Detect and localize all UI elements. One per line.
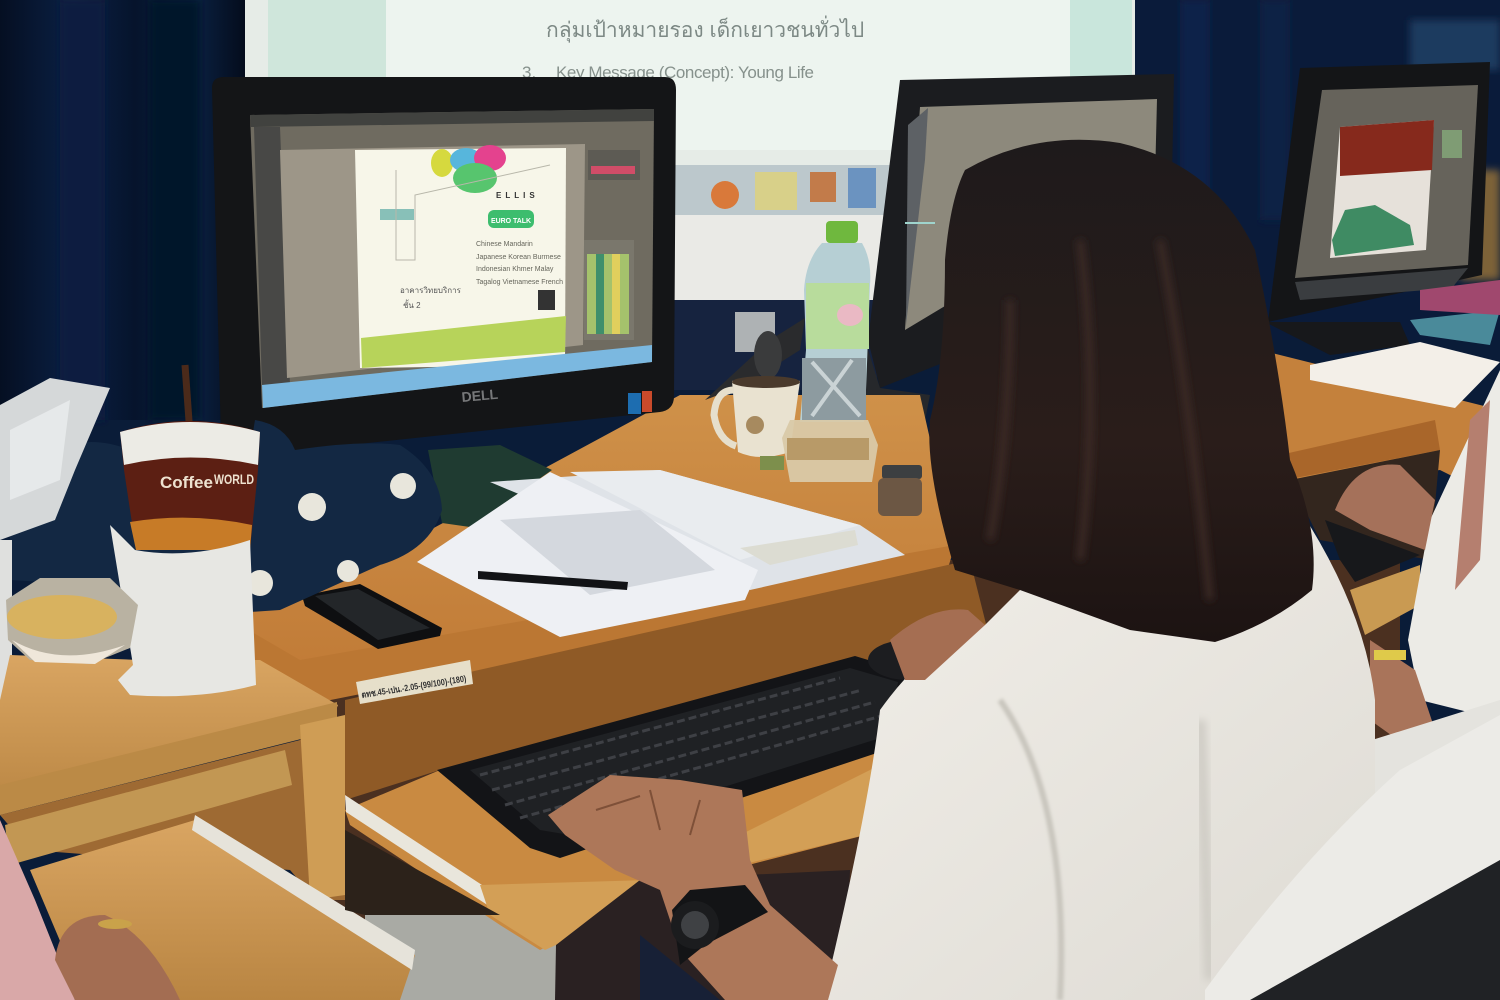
monitor: main Dell all-in-one bbox=[212, 77, 676, 527]
projector screen bbox=[245, 0, 1135, 390]
foreground chair and person bbox=[1205, 715, 1500, 1000]
woman: left forearm bbox=[890, 609, 985, 680]
stationery stack bbox=[1310, 280, 1500, 408]
woman: navy skirt bbox=[555, 870, 850, 1000]
artwork on screen: EURO TALK bbox=[491, 218, 531, 225]
desk: main surface bbox=[245, 395, 990, 800]
label strip on desk edge: ตทช.45-เปน.-2.05-(99/100)-(180) bbox=[361, 674, 467, 700]
side cabinet bbox=[0, 655, 415, 1000]
woman: shirt bbox=[770, 510, 1375, 1000]
curtain: right bbox=[1130, 0, 1500, 340]
artwork on screen: Tagalog Vietnamese French bbox=[476, 279, 563, 286]
artwork on screen: Indonesian Khmer Malay bbox=[476, 266, 554, 273]
artwork on screen: ELLIS bbox=[496, 191, 539, 200]
monitor stand bbox=[428, 445, 552, 527]
paper stack bbox=[417, 470, 905, 637]
keyboard tray bbox=[345, 750, 895, 950]
snack box bbox=[760, 420, 878, 482]
woman: hair bbox=[929, 140, 1314, 642]
coffee cup: WORLD bbox=[214, 471, 254, 487]
colour panel bbox=[588, 150, 640, 180]
DELL logo: DELL bbox=[461, 386, 499, 405]
monitor: right far bbox=[1265, 62, 1490, 355]
projector screen: 3. bbox=[522, 63, 536, 82]
keyboard bbox=[437, 656, 908, 858]
projected slide text: กลุ่มเป้าหมายรอง เด็กเยาวชนทั่วไป bbox=[546, 15, 864, 43]
small jar bbox=[878, 465, 922, 516]
wristwatch bbox=[671, 885, 768, 965]
artwork on screen: Japanese Korean Burmese bbox=[476, 254, 561, 261]
phone bbox=[302, 584, 442, 649]
water bottle bbox=[800, 221, 870, 422]
pastry box bbox=[6, 578, 138, 664]
plastic bag bbox=[0, 378, 110, 720]
coffee cup: Coffee bbox=[160, 473, 213, 492]
mouse bbox=[868, 640, 948, 680]
artwork on screen bbox=[380, 145, 563, 310]
paper cup bbox=[714, 376, 800, 457]
badges bbox=[628, 393, 641, 414]
curtain: left bbox=[0, 0, 245, 420]
polka dot bag bbox=[10, 420, 442, 612]
woman: right arm and hand bbox=[548, 775, 838, 1000]
headphones bbox=[705, 318, 805, 400]
artwork on screen: Chinese Mandarin bbox=[476, 241, 533, 248]
pen bbox=[478, 571, 628, 590]
monitor: center behind woman bbox=[860, 74, 1174, 420]
projected taskbar icons bbox=[711, 168, 876, 210]
projector screen: Key Message (Concept): Young Life bbox=[556, 63, 814, 82]
desk: back right bbox=[1260, 350, 1500, 635]
foreground person: left bbox=[0, 820, 180, 1000]
artwork on screen: อาคารวิทยบริการ bbox=[400, 286, 462, 295]
right person seat neighbour bbox=[1325, 370, 1500, 800]
swatches panel bbox=[584, 240, 634, 340]
artwork on screen: ชั้น 2 bbox=[403, 299, 421, 310]
coffee cup bbox=[110, 365, 260, 696]
label strip on desk edge bbox=[356, 660, 473, 704]
screen bbox=[250, 109, 654, 408]
